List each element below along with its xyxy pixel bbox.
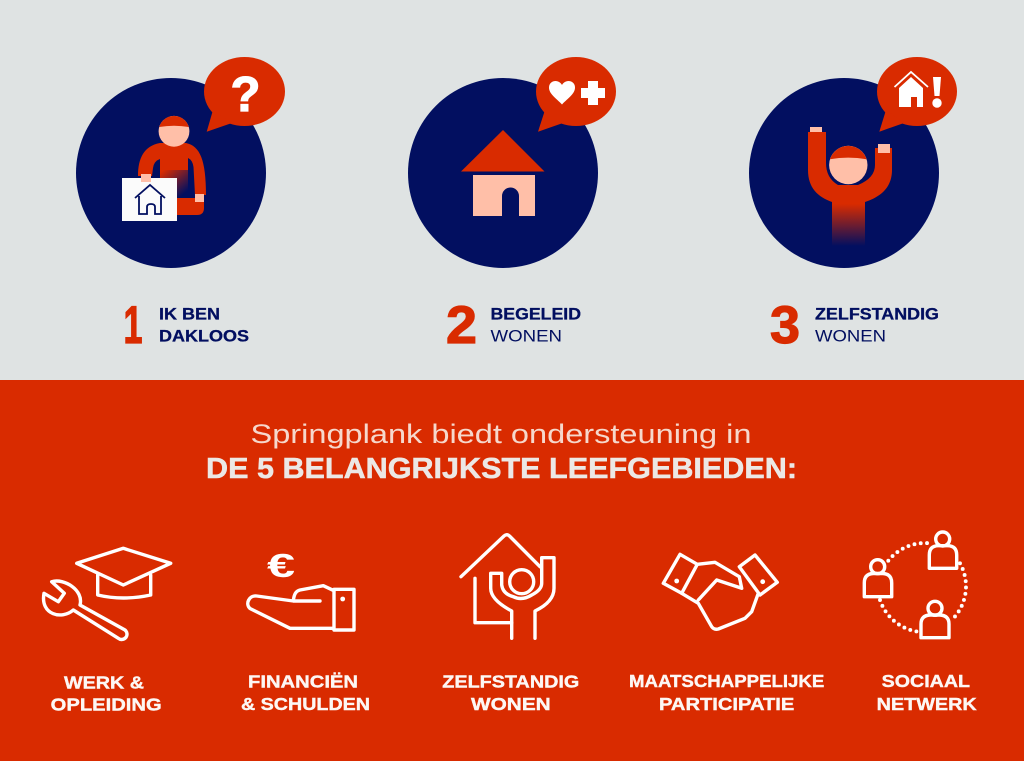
number 1: 1 bbox=[124, 296, 142, 355]
step 1: homeless bbox=[76, 57, 285, 355]
icon: house with person bbox=[461, 535, 554, 638]
navy circle 1 bbox=[76, 78, 266, 268]
life area: finances and debts bbox=[241, 547, 370, 714]
person holding sign bbox=[122, 116, 206, 221]
label: zelfstandig wonen: WONEN bbox=[471, 694, 551, 714]
navy circle 2 bbox=[408, 78, 598, 268]
icon: hand with euro bbox=[248, 547, 354, 630]
label: ik ben dakloos: DAKLOOS bbox=[159, 328, 249, 346]
step 2: assisted living bbox=[408, 57, 616, 355]
label: maatschappelijke participatie bbox=[629, 671, 824, 714]
life area: independent living bbox=[442, 535, 579, 714]
number 3: 3 bbox=[770, 296, 800, 355]
label: begeleid wonen: BEGELEID bbox=[490, 305, 581, 323]
number 2: 2 bbox=[446, 296, 477, 355]
label: begeleid wonen: WONEN bbox=[490, 328, 562, 346]
icon: three people in dotted circle bbox=[864, 532, 966, 638]
panel: steps background bbox=[0, 0, 1024, 380]
label: werk en opleiding bbox=[51, 672, 162, 715]
life area: social network bbox=[864, 532, 977, 714]
label: sociaal netwerk: NETWERK bbox=[877, 694, 977, 714]
label: begeleid wonen bbox=[490, 305, 581, 346]
label: maatschappelijke participatie: MAATSCHAPPELIJKE bbox=[629, 671, 824, 691]
speech bubble with heart and plus bbox=[536, 57, 616, 132]
speech bubble with question mark: ? bbox=[231, 68, 260, 122]
life area: work and education bbox=[44, 548, 171, 715]
label: zelfstandig wonen bbox=[442, 671, 579, 714]
panel: life areas background bbox=[0, 380, 1024, 761]
navy circle 3 bbox=[749, 78, 939, 268]
heading bbox=[206, 419, 797, 485]
speech bubble with house and exclamation mark bbox=[877, 57, 957, 132]
life area: social participation bbox=[629, 554, 824, 714]
label: financien en schulden: FINANCIËN bbox=[248, 671, 358, 691]
icon: hand with euro: € bbox=[267, 547, 295, 584]
label: maatschappelijke participatie: PARTICIPATIE bbox=[659, 694, 794, 714]
house bbox=[461, 130, 544, 216]
heading: Springplank biedt ondersteuning in bbox=[250, 419, 752, 449]
label: zelfstandig wonen: ZELFSTANDIG bbox=[815, 305, 939, 323]
label: werk en opleiding: OPLEIDING bbox=[51, 695, 162, 715]
label: zelfstandig wonen: ZELFSTANDIG bbox=[442, 671, 579, 691]
label: ik ben dakloos: IK BEN bbox=[159, 305, 220, 323]
label: zelfstandig wonen: WONEN bbox=[815, 328, 886, 346]
icon: graduation cap and wrench bbox=[44, 548, 171, 639]
label: werk en opleiding: WERK & bbox=[64, 672, 144, 692]
step 3: independent living bbox=[749, 57, 957, 355]
label: sociaal netwerk: SOCIAAL bbox=[882, 671, 970, 691]
heading: DE 5 BELANGRIJKSTE LEEFGEBIEDEN: bbox=[206, 453, 797, 485]
label: financien en schulden bbox=[241, 671, 370, 714]
speech bubble with question mark bbox=[204, 57, 285, 132]
label: zelfstandig wonen bbox=[815, 305, 939, 346]
label: ik ben dakloos bbox=[159, 305, 249, 346]
label: sociaal netwerk bbox=[877, 671, 977, 714]
icon: handshake bbox=[663, 554, 777, 629]
label: financien en schulden: & SCHULDEN bbox=[241, 694, 370, 714]
person with raised arms bbox=[808, 127, 892, 246]
